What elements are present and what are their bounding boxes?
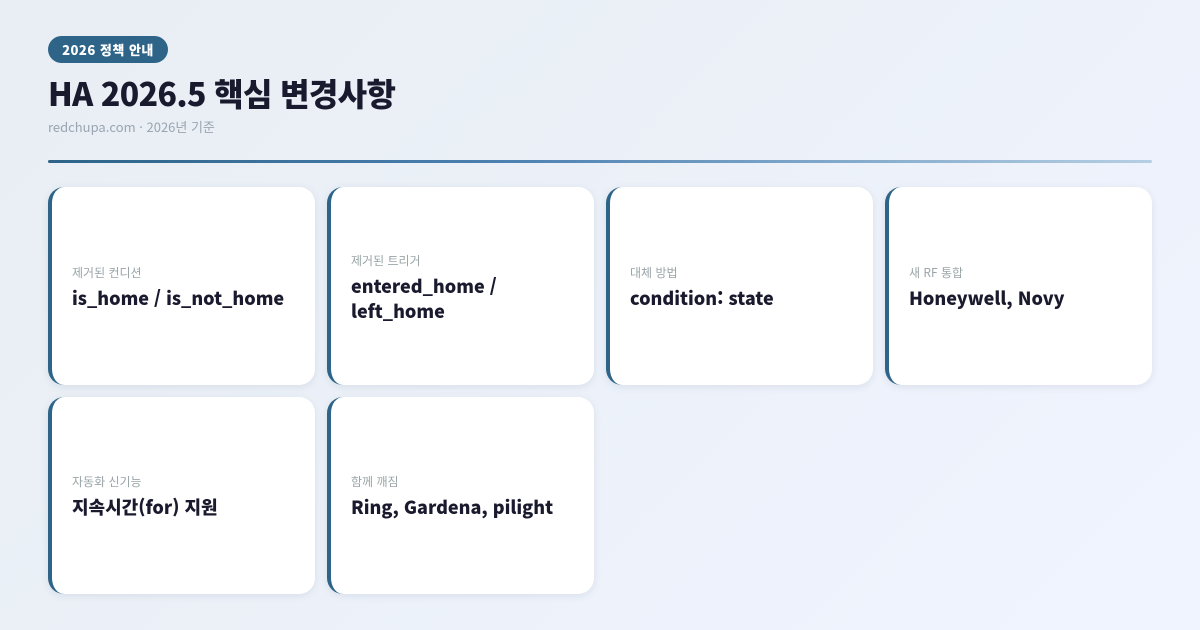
panel: new automation feature [48, 397, 315, 594]
badge: 2026 정책 안내 [62, 40, 154, 59]
value: removed condition: is_home / is_not_home [72, 284, 284, 310]
value: new RF integrations: Honeywell, Novy [909, 284, 1065, 310]
value: removed trigger [351, 273, 497, 324]
title: HA 2026.5 핵심 변경사항 [48, 70, 395, 116]
value: also broken: Ring, Gardena, pilight [351, 494, 553, 520]
label: new RF integrations: 새 RF 통합 [909, 264, 963, 280]
label: removed trigger: 제거된 트리거 [351, 252, 421, 269]
panel: replacement [606, 187, 873, 385]
badge [48, 36, 168, 63]
label: new automation feature: 자동화 신기능 [72, 473, 142, 490]
label: removed condition: 제거된 컨디션 [72, 264, 142, 280]
panel: removed condition [48, 187, 315, 385]
value: replacement: condition: state [630, 284, 774, 310]
panel: new RF integrations [885, 187, 1152, 385]
subtitle: redchupa.com · 2026년 기준 [48, 117, 215, 136]
value: removed trigger: left_home [351, 298, 445, 324]
value: removed trigger: entered_home / [351, 273, 497, 299]
value: new automation feature: 지속시간(for) 지원 [72, 494, 218, 520]
label: also broken: 함께 깨짐 [351, 473, 399, 490]
panel: also broken [327, 397, 594, 594]
panel: removed trigger [327, 187, 594, 385]
label: replacement: 대체 방법 [630, 264, 678, 280]
